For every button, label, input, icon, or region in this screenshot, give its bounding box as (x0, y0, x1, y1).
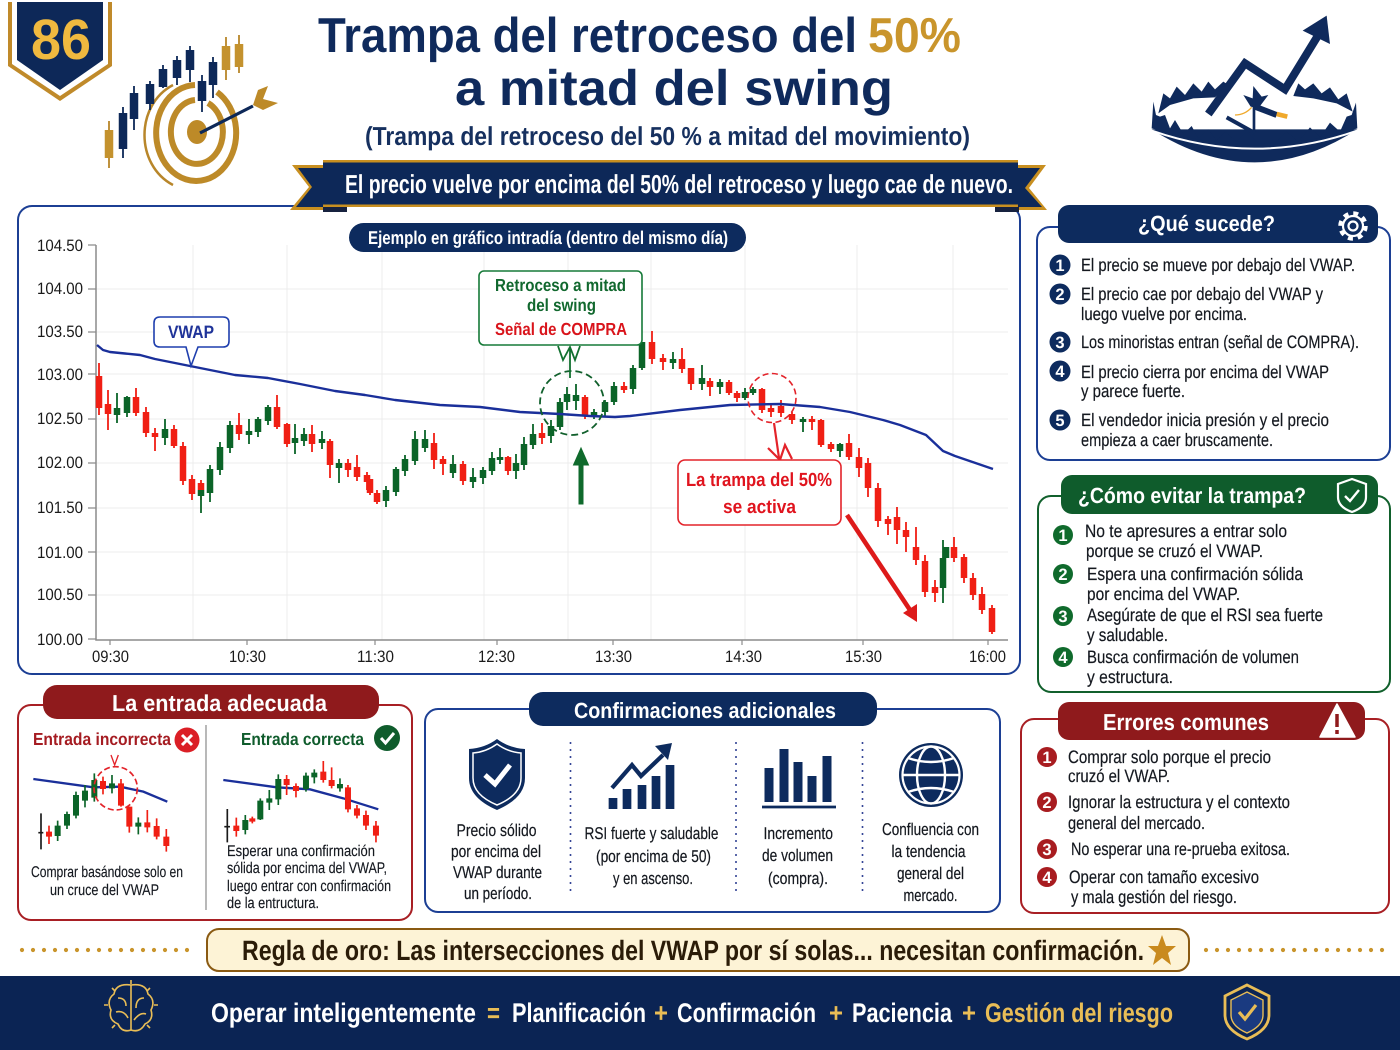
list: how to avoid steps: por encima del VWAP. (1087, 584, 1240, 604)
list: how to avoid steps: y estructura. (1087, 667, 1173, 687)
text: strong price: VWAP durante (453, 863, 542, 882)
panel: how to avoid (1038, 475, 1390, 692)
subheading: right entry (241, 725, 400, 751)
text: volume: Incremento (764, 824, 833, 843)
text: RSI: RSI fuerte y saludable (584, 824, 718, 843)
footer formula text: Operar inteligentemente (211, 998, 476, 1028)
panel: additional confirmations (425, 692, 1000, 912)
list: how to avoid steps: Asegúrate de que el RSI sea fuerte (1087, 605, 1323, 625)
callout: trap activated: La trampa del 50% (686, 470, 832, 491)
x axis labels (92, 648, 1006, 666)
title: a mitad del swing (455, 60, 893, 116)
heading: ¿Qué sucede?: ¿Qué sucede? (1138, 211, 1275, 236)
x axis labels: 09:30 (92, 648, 129, 666)
list: common errors: general del mercado. (1068, 813, 1205, 833)
text: volume: de volumen (762, 846, 833, 865)
list: common errors: 3 (1042, 841, 1052, 859)
text: strong price: por encima del (451, 842, 541, 861)
x axis labels: 11:30 (357, 648, 394, 666)
y axis labels: 100.50 (37, 586, 83, 604)
text: volume (762, 824, 833, 888)
subheading: wrong entry: Entrada incorrecta (33, 729, 171, 749)
banner ribbon: El precio vuelve por encima del 50% del retroceso y luego cae de nuevo. (345, 169, 1013, 199)
footer formula text: Planificación (512, 998, 646, 1028)
panel: proper entry (18, 685, 412, 920)
arrow: trap circle to callout (768, 423, 792, 460)
heading: La entrada adecuada: La entrada adecuada (112, 690, 327, 716)
callout: VWAP label: VWAP (168, 322, 214, 342)
x axis labels: 12:30 (478, 648, 515, 666)
arrow: green up arrow (574, 448, 588, 504)
icon: gear (1340, 214, 1366, 238)
list: what happens steps: 2 (1055, 286, 1065, 304)
icon: shield check (469, 739, 525, 810)
heading: Confirmaciones adicionales (529, 692, 877, 726)
list: how to avoid steps: 2 (1058, 566, 1068, 584)
text: volume: (compra). (768, 869, 828, 888)
banner ribbon (290, 160, 1047, 212)
x axis labels: 10:30 (229, 648, 266, 666)
chart: right entry mini candles (223, 761, 378, 842)
y axis labels: 100.00 (37, 631, 83, 649)
y axis labels: 104.00 (37, 280, 83, 298)
chart: wrong entry mini candles (33, 755, 167, 852)
icon: check shield (1338, 479, 1366, 512)
list: common errors: 2 (1042, 794, 1052, 812)
subheading: right entry: Entrada correcta (241, 729, 364, 749)
list: what happens steps: El precio cierra por encima del VWAP (1081, 362, 1329, 382)
text: confluence: mercado. (904, 886, 958, 905)
list: how to avoid steps: 4 (1058, 649, 1068, 667)
list: what happens steps: luego vuelve por encima. (1081, 304, 1247, 324)
footer formula text (211, 998, 1173, 1028)
icon: star (1148, 935, 1176, 965)
list: what happens steps: 5 (1055, 412, 1065, 430)
title: 50% (868, 9, 961, 63)
title: Trampa del retroceso del (318, 9, 857, 63)
text: strong price: Precio sólido (456, 821, 536, 840)
text: right entry caption (227, 843, 391, 912)
highlight circle: buy signal zone (540, 371, 604, 435)
y axis labels: 102.00 (37, 454, 83, 472)
text: right entry caption: luego entrar con confirmación (227, 878, 391, 895)
text: RSI: (por encima de 50) (596, 847, 711, 866)
text: right entry caption: sólida por encima del VWAP, (227, 860, 387, 877)
list: common errors: cruzó el VWAP. (1068, 766, 1170, 786)
x axis labels: 16:00 (969, 648, 1006, 666)
text: wrong entry caption (31, 864, 183, 899)
footer formula text: Paciencia (852, 998, 953, 1028)
y axis labels: 101.50 (37, 499, 83, 517)
list: what happens steps: 4 (1055, 363, 1065, 381)
list: what happens steps (1050, 254, 1359, 450)
badge: number 86: 86 (31, 8, 91, 72)
callout: golden rule: Regla de oro: Las intersecciones del VWAP por sí solas... necesitan confirmación. (242, 935, 1144, 966)
icon: rising bars (612, 743, 672, 809)
list: common errors: Comprar solo porque el precio (1068, 747, 1271, 767)
icon: footer shield (1225, 985, 1269, 1039)
heading: ¿Qué sucede? (1058, 205, 1378, 243)
badge: number 86 (8, 2, 112, 101)
text: confluence (882, 820, 979, 905)
callout: buy signal (479, 271, 642, 345)
y axis labels: 103.00 (37, 366, 83, 384)
footer formula text: + (962, 998, 976, 1028)
list: common errors (1037, 747, 1290, 907)
list: common errors: Operar con tamaño excesivo (1069, 867, 1259, 887)
text: RSI: y en ascenso. (613, 869, 693, 888)
x axis labels: 13:30 (595, 648, 632, 666)
x axis labels: 15:30 (845, 648, 882, 666)
list: how to avoid steps: No te apresures a entrar solo (1085, 521, 1287, 541)
heading: chart pill: Ejemplo en gráfico intradía (dentro del mismo día) (368, 227, 728, 248)
text: RSI (584, 824, 718, 888)
panel: common errors (1021, 702, 1389, 913)
panel: intraday chart (18, 206, 1020, 674)
callout: trap activated: se activa (723, 497, 796, 518)
text: strong price (451, 821, 542, 903)
subtitle: (Trampa del retroceso del 50 % a mitad del movimiento) (365, 121, 970, 151)
list: how to avoid steps: Busca confirmación de volumen (1087, 647, 1299, 667)
footer formula text: + (829, 998, 843, 1028)
y axis labels (37, 237, 83, 649)
icon: bear trap with rising arrow (1152, 16, 1357, 162)
heading: Confirmaciones adicionales: Confirmaciones adicionales (574, 698, 836, 723)
list: common errors: Ignorar la estructura y el contexto (1068, 792, 1290, 812)
title (318, 9, 961, 116)
arrow: price drop (847, 515, 917, 622)
list: what happens steps: El precio cae por debajo del VWAP y (1081, 284, 1323, 304)
icon: candlesticks and target (109, 35, 278, 185)
x axis labels: 14:30 (725, 648, 762, 666)
text: strong price: un período. (464, 884, 532, 903)
text: confluence: general del (897, 864, 964, 883)
list: common errors: 1 (1042, 749, 1052, 767)
callout: trap activated (678, 460, 841, 525)
red candles (99, 331, 992, 634)
list: how to avoid steps: Espera una confirmación sólida (1087, 564, 1304, 584)
list: how to avoid steps: porque se cruzó el VWAP. (1086, 541, 1263, 561)
panel: what happens (1037, 205, 1390, 460)
callout: buy signal: Señal de COMPRA (495, 319, 627, 339)
heading: ¿Cómo evitar la trampa? (1061, 475, 1378, 514)
y axis labels: 103.50 (37, 323, 83, 341)
heading: Errores comunes: Errores comunes (1103, 709, 1269, 735)
arrow: circle to buy callout (558, 346, 580, 378)
icon: warning triangle (1320, 704, 1355, 737)
heading: La entrada adecuada (43, 685, 379, 719)
y axis labels: 102.50 (37, 410, 83, 428)
callout: VWAP label (154, 317, 229, 366)
list: how to avoid steps: y saludable. (1087, 625, 1168, 645)
callout: buy signal: del swing (527, 295, 596, 315)
heading: chart pill (349, 223, 746, 252)
text: wrong entry caption: un cruce del VWAP (50, 882, 159, 899)
list: how to avoid steps: 3 (1058, 608, 1068, 626)
green candles (117, 342, 946, 603)
list: common errors: No esperar una re-prueba exitosa. (1071, 839, 1290, 859)
text: right entry caption: Esperar una confirmación (227, 843, 375, 860)
list: what happens steps: El vendedor inicia presión y el precio (1081, 410, 1329, 430)
list: what happens steps: 1 (1055, 257, 1065, 275)
list: what happens steps: 3 (1055, 334, 1065, 352)
y axis labels: 104.50 (37, 237, 83, 255)
text: wrong entry caption: Comprar basándose solo en (31, 864, 183, 881)
list: common errors: y mala gestión del riesgo. (1071, 887, 1237, 907)
highlight circle: trap zone (748, 374, 796, 422)
footer formula text: + (654, 998, 668, 1028)
footer formula text: Gestión del riesgo (985, 998, 1173, 1028)
footer band (0, 976, 1400, 1050)
icon: brain (104, 980, 158, 1031)
callout: buy signal: Retroceso a mitad (495, 275, 626, 295)
heading: Errores comunes (1058, 702, 1365, 740)
footer formula text: Confirmación (677, 998, 816, 1028)
text: right entry caption: de la entructura. (227, 895, 319, 912)
chart: candlestick price chart with VWAP (37, 237, 1008, 666)
footer formula text: = (487, 998, 500, 1028)
heading: ¿Cómo evitar la trampa?: ¿Cómo evitar la trampa? (1078, 483, 1306, 508)
list: how to avoid steps (1053, 521, 1323, 687)
list: what happens steps: y parece fuerte. (1081, 381, 1185, 401)
list: common errors: 4 (1042, 869, 1052, 887)
text: confluence: la tendencia (892, 842, 966, 861)
text: confluence: Confluencia con (882, 820, 979, 839)
list: how to avoid steps: 1 (1058, 527, 1068, 545)
icon: volume bars (762, 749, 836, 807)
y axis labels: 101.00 (37, 544, 83, 562)
icon: globe (899, 743, 963, 807)
VWAP line (97, 345, 993, 469)
list: what happens steps: empieza a caer bruscamente. (1081, 430, 1273, 450)
callout: golden rule (207, 929, 1189, 971)
